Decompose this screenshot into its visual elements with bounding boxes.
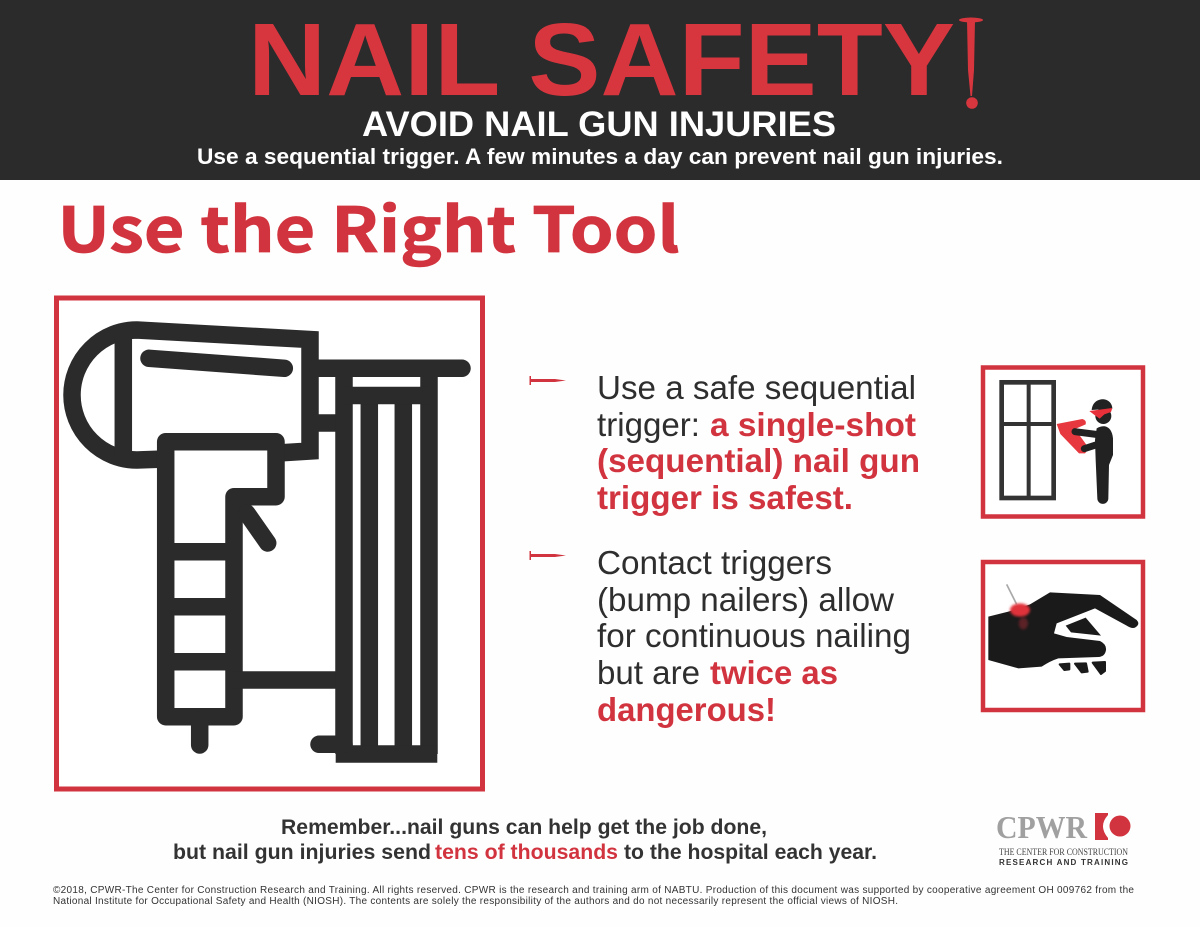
footer copyright <box>53 885 1134 907</box>
text block: contact triggers <box>597 544 911 728</box>
closing message: but nail gun injuries send <box>173 841 431 864</box>
logo: CPWR: CPWR <box>996 809 1088 845</box>
panel: nail gun icon <box>56 298 482 789</box>
text block: contact triggers: (bump nailers) allow <box>597 581 894 618</box>
title: NAIL SAFETY <box>248 2 955 117</box>
text block: sequential trigger <box>597 369 920 516</box>
closing message <box>173 816 877 864</box>
footer copyright: National Institute for Occupational Safety and Health (NIOSH). The contents are solely the responsibility of the authors and do not necessarily represent the official views of NIOSH. <box>53 896 898 907</box>
subtitle: AVOID NAIL GUN INJURIES <box>362 105 836 144</box>
text block: sequential trigger: (sequential) nail gun <box>597 442 920 479</box>
text block: sequential trigger: Use a safe sequential <box>597 369 916 406</box>
header banner <box>0 0 1200 180</box>
logo: CPWR <box>996 809 1130 867</box>
tagline: Use a sequential trigger. A few minutes a day can prevent nail gun injuries. <box>197 144 1003 169</box>
nail in hand <box>1007 584 1017 604</box>
closing message: to the hospital each year. <box>624 841 877 864</box>
text block: sequential trigger: a single-shot <box>710 406 916 443</box>
text block: sequential trigger: trigger: <box>597 406 700 443</box>
worker <box>1075 399 1113 504</box>
closing message: tens of thousands <box>435 841 618 864</box>
window <box>1002 382 1054 498</box>
bullet: nail 2 <box>530 551 566 560</box>
text block: contact triggers: Contact triggers <box>597 544 832 581</box>
text block: contact triggers: dangerous! <box>597 691 776 728</box>
logo: CPWR: THE CENTER FOR CONSTRUCTION <box>999 847 1128 857</box>
text block: contact triggers: but are <box>597 654 700 691</box>
text block: contact triggers: for continuous nailing <box>597 617 911 654</box>
text block: sequential trigger: trigger is safest. <box>597 479 853 516</box>
closing message: Remember...nail guns can help get the job done, <box>281 816 767 839</box>
icon: nail exclamation mark <box>959 18 983 109</box>
footer copyright: ©2018, CPWR-The Center for Construction Research and Training. All rights reserved. CPWR is the research and training arm of NABTU. Production of this document was supported by cooperative agreement OH 009762 from the <box>53 885 1134 896</box>
red nail gun <box>1057 419 1089 453</box>
icon: injured hand <box>983 562 1143 710</box>
text block: contact triggers: twice as <box>710 654 838 691</box>
heading: Use the Right Tool <box>58 180 680 270</box>
bullet: nail 1 <box>530 376 566 385</box>
logo: CPWR: RESEARCH AND TRAINING <box>999 858 1128 867</box>
icon: worker using nail gun at window <box>983 368 1143 516</box>
